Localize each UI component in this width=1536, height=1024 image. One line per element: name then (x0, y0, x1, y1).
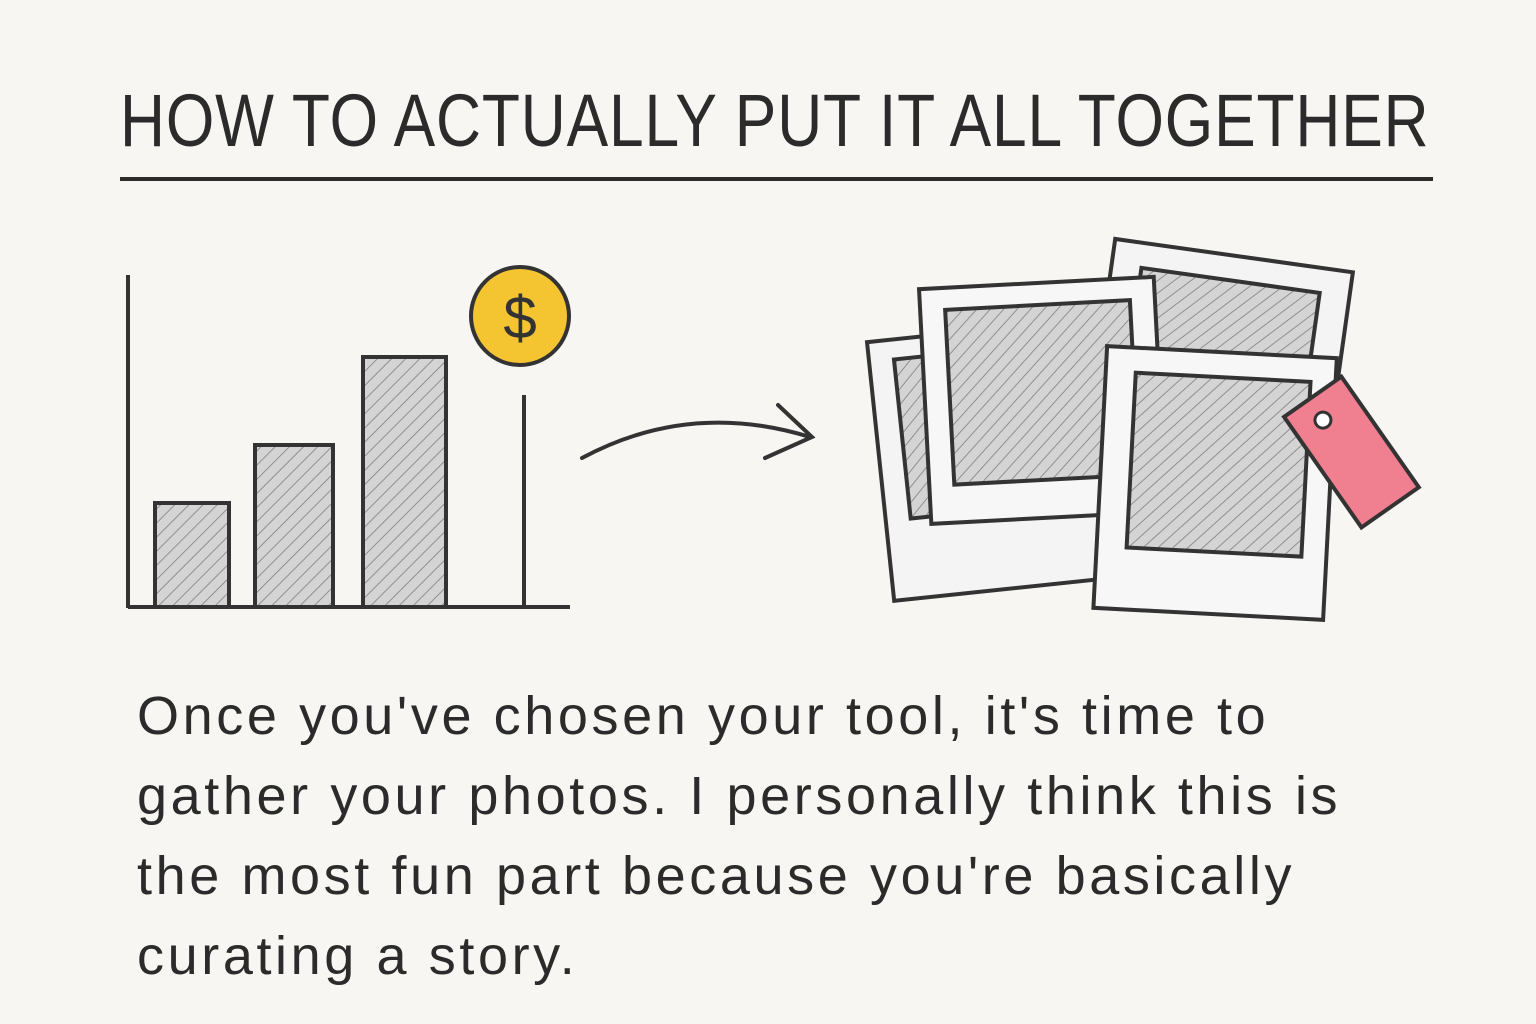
icon: dollar coin: $ (503, 284, 537, 351)
title: HOW TO ACTUALLY PUT IT ALL TOGETHER (120, 79, 1429, 162)
icon: dollar coin (471, 267, 569, 365)
body text: gather your photos. I personally think this is (137, 766, 1341, 826)
body text (137, 686, 1341, 986)
body text: Once you've chosen your tool, it's time to (137, 686, 1269, 746)
icon: price tag (1284, 377, 1419, 527)
photos stack (867, 239, 1353, 620)
bar chart (128, 275, 570, 608)
body text: the most fun part because you're basically (137, 846, 1295, 906)
body text: curating a story. (137, 926, 578, 986)
arrow (582, 405, 812, 458)
